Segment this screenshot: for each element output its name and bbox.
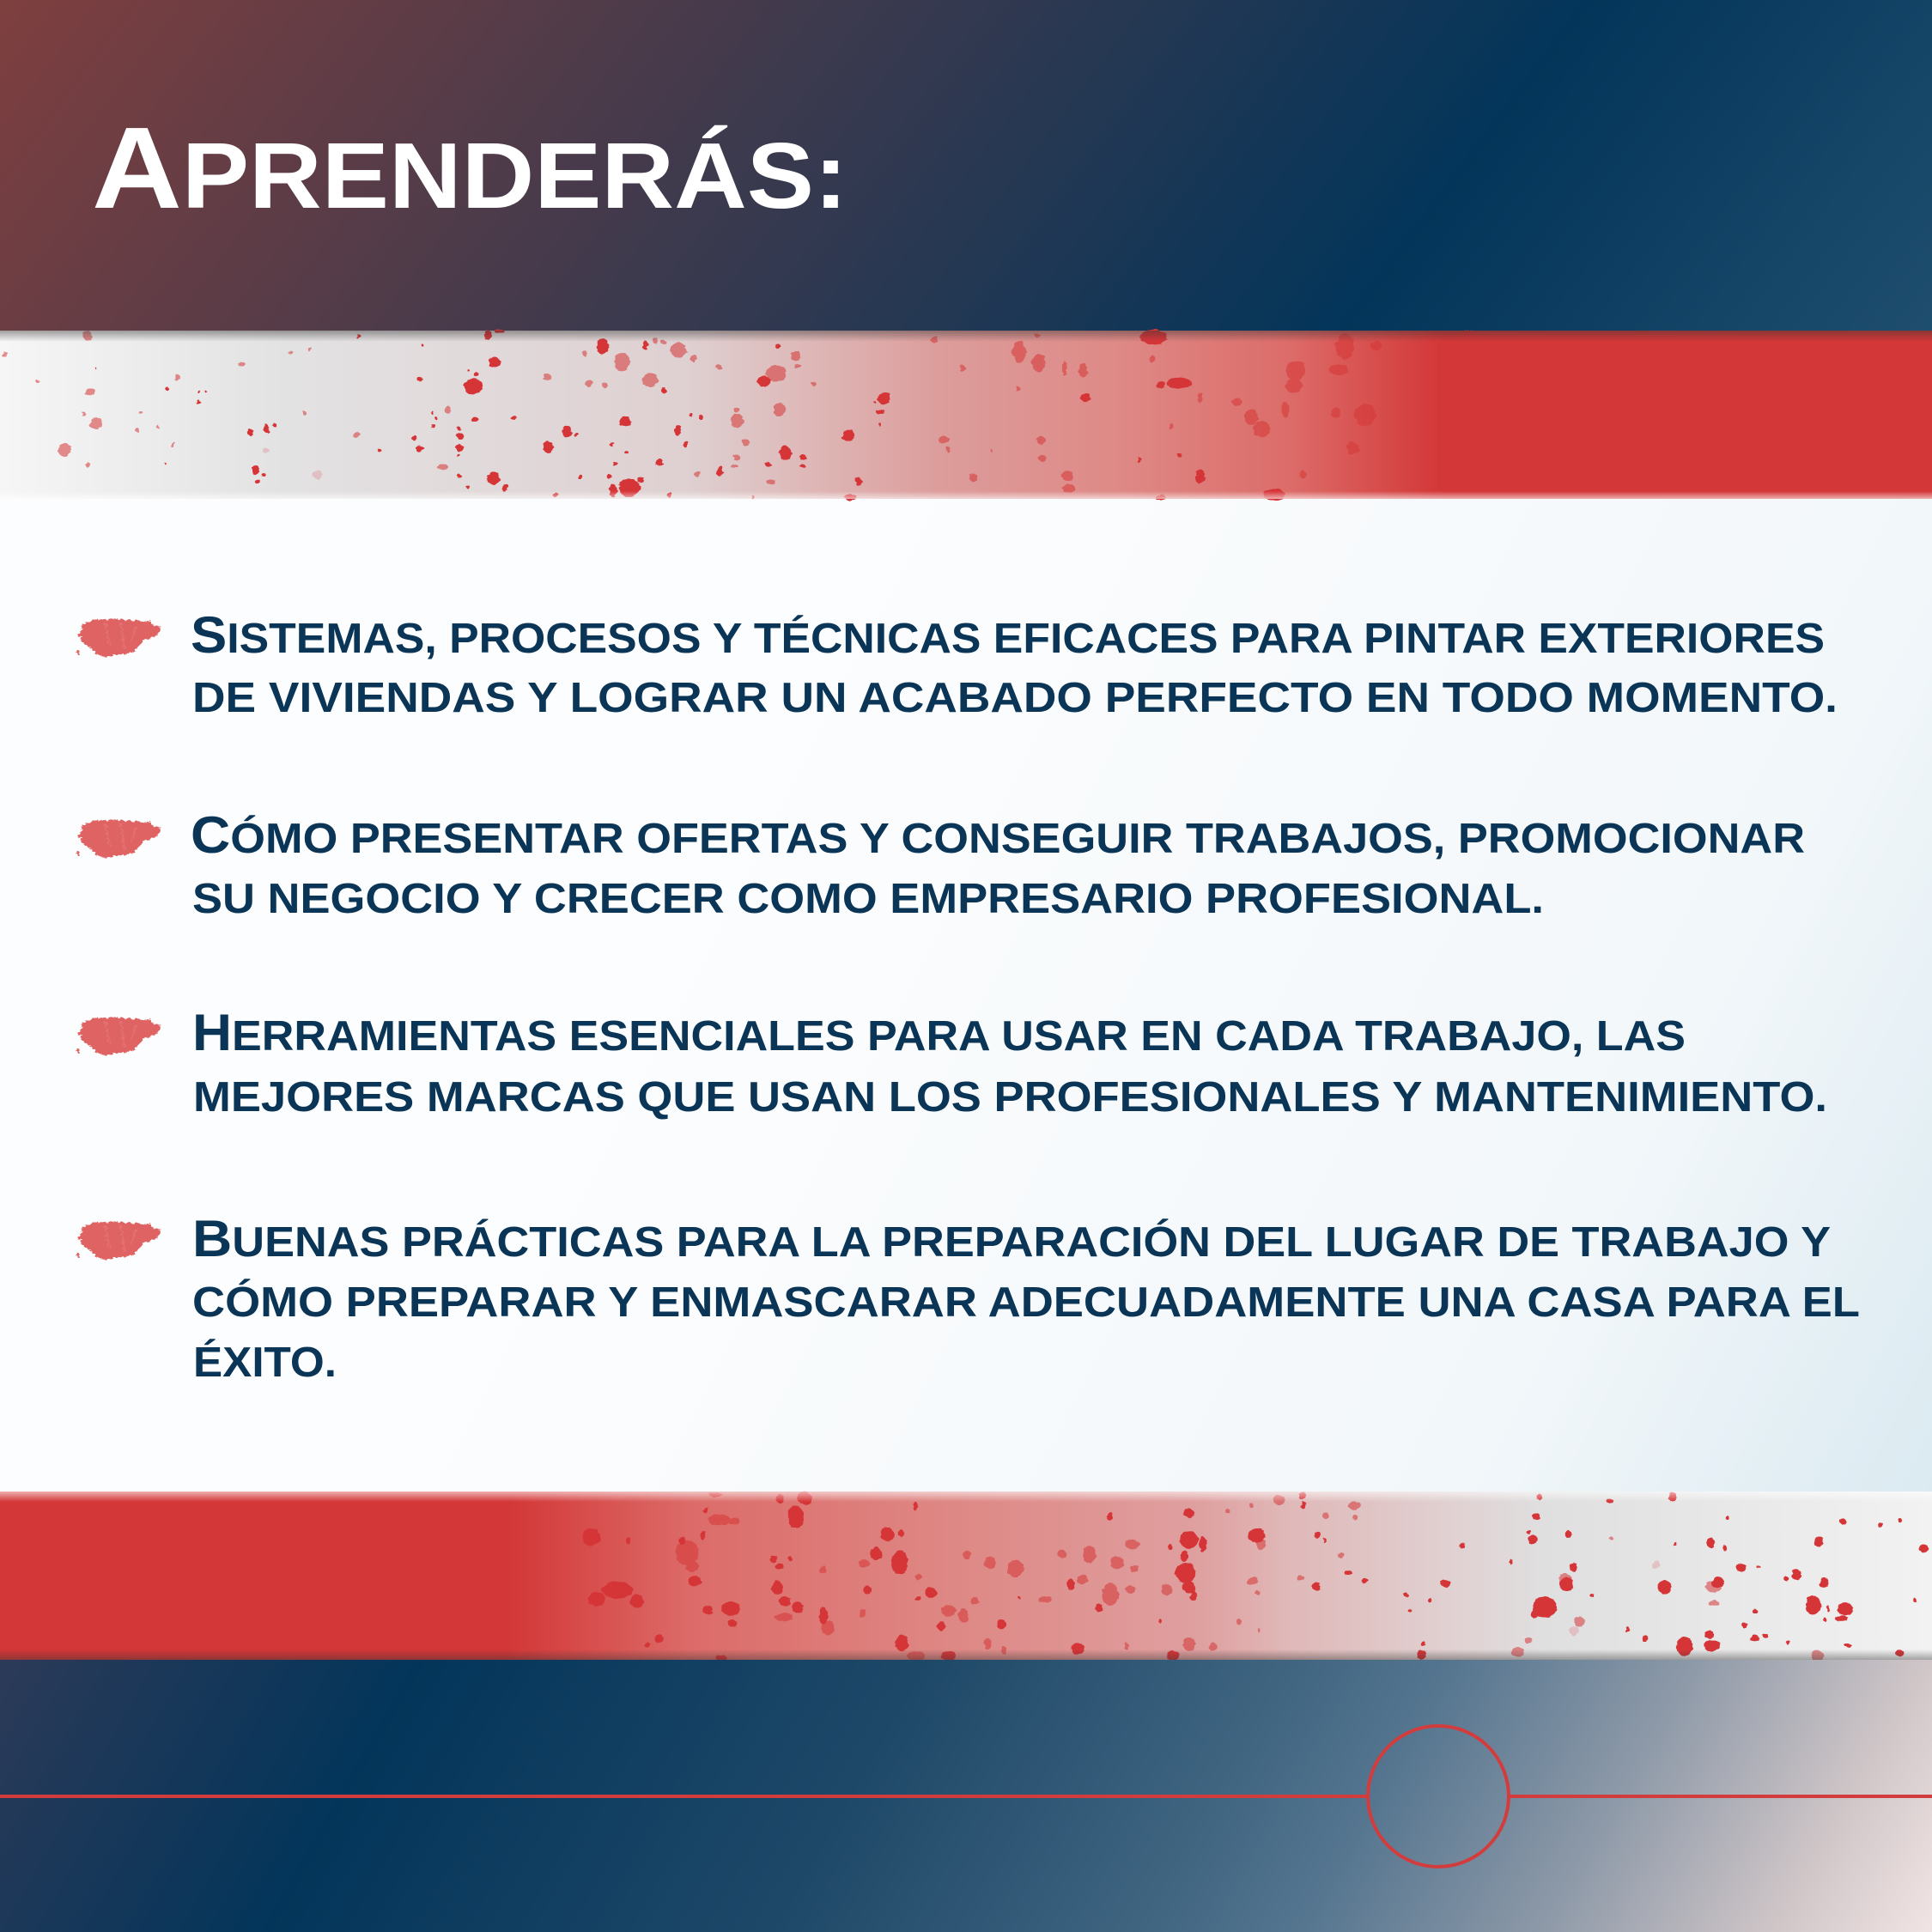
panel: top paint splatter band — [0, 330, 1932, 501]
icon: brush stroke bullet 3 — [76, 1018, 161, 1055]
panel: header gradient — [0, 0, 1932, 331]
title: APRENDERÁS: — [92, 103, 848, 233]
panel: bottom paint splatter band — [0, 1492, 1932, 1662]
text: item 1: DE VIVIENDAS Y LOGRAR UN ACABADO PERFECTO EN TODO MOMENTO. — [192, 675, 1838, 721]
text: item 2 — [191, 806, 1805, 922]
icon: brush stroke bullet 4 — [76, 1222, 161, 1260]
footer line with circle — [0, 1726, 1932, 1867]
icon: brush stroke bullet 1 — [76, 619, 161, 657]
text: item 4: CÓMO PREPARAR Y ENMASCARAR ADECUADAMENTE UNA CASA PARA EL — [192, 1279, 1860, 1326]
panel: footer gradient — [0, 1660, 1932, 1932]
icon: brush stroke bullet 2 — [76, 820, 161, 858]
text: item 3: HERRAMIENTAS ESENCIALES PARA USAR EN CADA TRABAJO, LAS — [192, 1004, 1686, 1061]
text: item 2: CÓMO PRESENTAR OFERTAS Y CONSEGUIR TRABAJOS, PROMOCIONAR — [191, 806, 1805, 864]
text: item 2: SU NEGOCIO Y CRECER COMO EMPRESARIO PROFESIONAL. — [192, 876, 1544, 922]
text: item 4: BUENAS PRÁCTICAS PARA LA PREPARACIÓN DEL LUGAR DE TRABAJO Y — [192, 1210, 1831, 1267]
text: item 1: SISTEMAS, PROCESOS Y TÉCNICAS EFICACES PARA PINTAR EXTERIORES — [191, 606, 1825, 664]
text: item 3: MEJORES MARCAS QUE USAN LOS PROFESIONALES Y MANTENIMIENTO. — [193, 1074, 1827, 1121]
text: item 4: ÉXITO. — [193, 1340, 337, 1386]
text: item 4 — [192, 1210, 1860, 1386]
text: item 1 — [191, 606, 1838, 721]
panel: content background — [0, 498, 1932, 1492]
text: item 3 — [192, 1004, 1827, 1121]
